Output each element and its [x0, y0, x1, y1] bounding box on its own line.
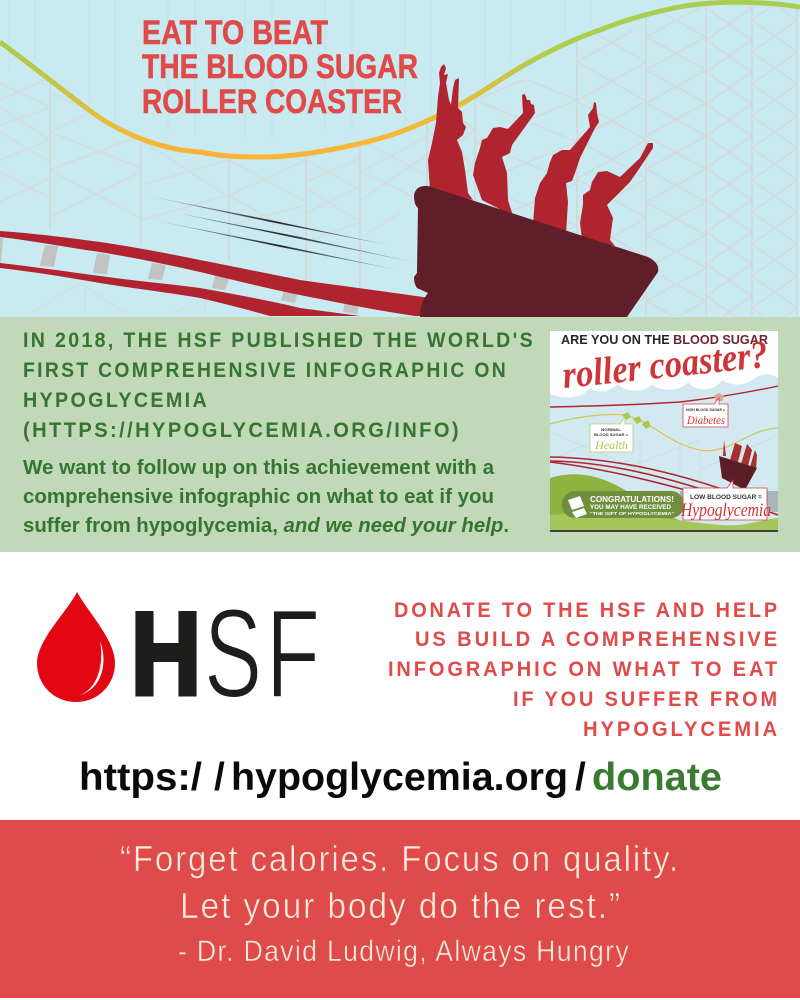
- thumbnail callout: hypoglycemia: Hypoglycemia: [680, 500, 771, 521]
- thumbnail callout: health: BLOOD SUGAR =: [594, 433, 628, 437]
- thumbnail upper rail: [550, 386, 778, 407]
- body text: suffer from hypoglycemia, and we need your help.: [23, 515, 509, 537]
- donation url: /: [575, 756, 586, 799]
- body text: [23, 457, 509, 537]
- title: ROLLER COASTER: [142, 83, 402, 121]
- thumbnail congratulations banner: "THE GIFT OF HYPOGLYCEMIA": [590, 511, 674, 516]
- heading: 2018 infographic: HYPOGLYCEMIA: [23, 389, 209, 412]
- logo wordmark: H: [131, 588, 201, 719]
- icon: blood drop: [37, 592, 115, 702]
- thumbnail callout: hypoglycemia: [680, 480, 771, 521]
- title: EAT TO BEAT: [142, 14, 328, 52]
- donation url: donate: [592, 756, 722, 799]
- quote text: Let your body do the rest.”: [180, 885, 622, 926]
- donation call to action: [388, 599, 780, 741]
- thumbnail congratulations banner: CONGRATULATIONS!: [590, 495, 674, 504]
- donation call to action: DONATE TO THE HSF AND HELP: [394, 599, 780, 622]
- lower red rails: [0, 231, 430, 316]
- logo wordmark: F: [266, 583, 320, 724]
- body text: We want to follow up on this achievement with a: [23, 457, 495, 479]
- coaster car: [414, 186, 658, 317]
- thumbnail yellow track: [550, 414, 778, 451]
- thumbnail of previous infographic: [550, 331, 778, 532]
- thumbnail callout: health: [590, 412, 651, 452]
- donation url: /: [214, 756, 225, 799]
- thumbnail clouds: [550, 331, 778, 397]
- silhouettes of riders: [428, 64, 653, 246]
- rail ties: [0, 238, 359, 314]
- thumbnail car: [719, 440, 757, 490]
- panel: quote: [0, 820, 800, 998]
- quote attribution: - Dr. David Ludwig, Always Hungry: [178, 935, 630, 968]
- heading: 2018 infographic: FIRST COMPREHENSIVE INFOGRAPHIC ON: [23, 359, 508, 382]
- logo: HSF blood drop: [37, 583, 320, 724]
- donation call to action: HYPOGLYCEMIA: [583, 718, 780, 741]
- thumbnail script title: roller coaster?: [560, 333, 770, 397]
- heading: 2018 infographic: (HTTPS://HYPOGLYCEMIA.ORG/INFO): [23, 419, 461, 442]
- donation url: hypoglycemia.org: [231, 756, 568, 799]
- body text: comprehensive infographic on what to eat if you: [23, 486, 494, 508]
- donation url: https:/: [79, 756, 202, 799]
- thumbnail hill: [550, 474, 680, 520]
- thumbnail callout: hypoglycemia: LOW BLOOD SUGAR =: [690, 494, 762, 501]
- speed lines: [148, 196, 413, 270]
- thumbnail congratulations banner: YOU MAY HAVE RECEIVED: [590, 505, 672, 511]
- logo wordmark: [131, 583, 320, 724]
- thumbnail heading: ARE YOU ON THE BLOOD SUGAR: [561, 333, 768, 347]
- donation call to action: IF YOU SUFFER FROM: [513, 688, 780, 711]
- quote text: “Forget calories. Focus on quality.: [120, 838, 680, 879]
- thumbnail lower rails: [550, 457, 778, 515]
- heading: 2018 infographic: IN 2018, THE HSF PUBLISHED THE WORLD'S: [23, 329, 535, 352]
- donation url: [79, 756, 722, 799]
- panel: 2018 infographic announcement: [0, 317, 800, 552]
- thumbnail callout: diabetes: [683, 393, 728, 427]
- donation call to action: US BUILD A COMPREHENSIVE: [415, 628, 780, 651]
- thumbnail congratulations banner: [562, 491, 778, 518]
- donation call to action: INFOGRAPHIC ON WHAT TO EAT: [388, 658, 780, 681]
- panel: roller coaster banner: [0, 0, 800, 317]
- thumbnail bottom strip: [550, 513, 778, 530]
- thumbnail scaffolding: [550, 432, 778, 475]
- thumbnail callout: health: Health: [594, 438, 628, 452]
- thumbnail callout: health: NORMAL: [601, 428, 622, 432]
- quote text: [120, 838, 680, 926]
- thumbnail callout: diabetes: Diabetes: [686, 413, 725, 427]
- coaster track curve: [0, 2, 800, 157]
- heading: 2018 infographic: [23, 329, 535, 442]
- title: THE BLOOD SUGAR: [142, 48, 418, 86]
- trestle scaffolding: [0, 0, 797, 316]
- thumbnail gift icon: [568, 496, 587, 518]
- logo wordmark: S: [204, 583, 262, 724]
- title: [142, 14, 418, 121]
- thumbnail callout: diabetes: HIGH BLOOD SUGAR =: [686, 408, 726, 412]
